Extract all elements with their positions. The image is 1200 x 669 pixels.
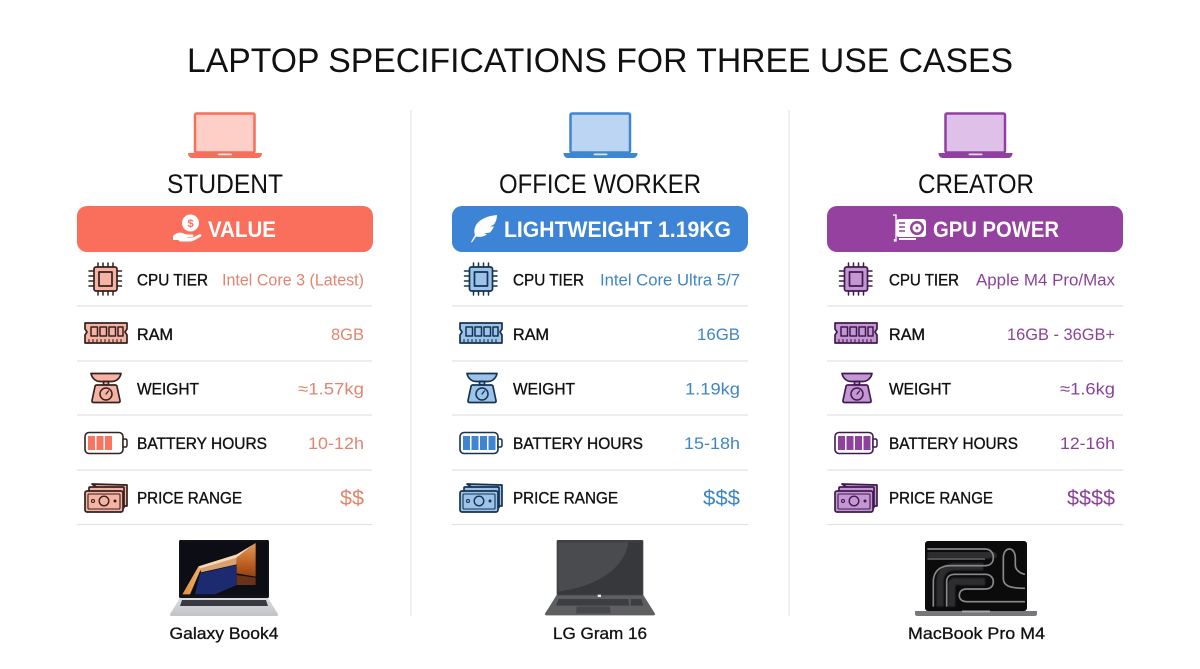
banner: value: [77, 206, 373, 252]
banner: gpu power: GPU POWER: [933, 217, 1059, 242]
row: price range: [827, 484, 1123, 524]
panel: student: [77, 114, 373, 643]
banner: lightweight: LIGHTWEIGHT 1.19KG: [504, 217, 731, 242]
panel: office worker: [452, 114, 748, 643]
row: weight: WEIGHT: [137, 380, 199, 398]
icon: hand with coin: [173, 214, 201, 242]
product name: lg gram 16: LG Gram 16: [553, 625, 647, 643]
row: battery hours: 10-12h: [308, 434, 364, 453]
row: weight: [827, 374, 1123, 415]
row: price range: PRICE RANGE: [137, 490, 242, 508]
icon: battery four bars purple: [835, 432, 877, 454]
icon: battery four bars: [460, 432, 502, 454]
row: cpu tier: [77, 263, 372, 306]
icon: hand with coin: $: [187, 218, 194, 230]
row: ram: 16GB - 36GB+: [1007, 325, 1115, 344]
product name: galaxy book4: Galaxy Book4: [170, 625, 278, 643]
product image: galaxy book4: [170, 540, 278, 616]
row: ram: [77, 323, 372, 361]
row: price range: $$$$: [1067, 487, 1115, 510]
column divider right: [788, 110, 790, 616]
product name: macbook pro m4: MacBook Pro M4: [908, 625, 1045, 643]
icon: office laptop: [564, 114, 638, 158]
column divider left: [410, 110, 412, 616]
row: battery hours: [452, 432, 748, 470]
row: ram: 16GB: [697, 325, 740, 344]
row: cpu tier: CPU TIER: [513, 272, 584, 290]
row: weight: [452, 374, 748, 415]
row: cpu tier: CPU TIER: [889, 272, 959, 290]
title: LAPTOP SPECIFICATIONS FOR THREE USE CASES: [187, 42, 1013, 80]
banner: lightweight: [452, 206, 748, 252]
row: battery hours: BATTERY HOURS: [137, 435, 267, 453]
row: battery hours: BATTERY HOURS: [889, 435, 1018, 453]
row: price range: PRICE RANGE: [513, 490, 618, 508]
silver base: [170, 598, 278, 616]
row: price range: $$$: [703, 487, 740, 510]
row: ram: [452, 323, 748, 361]
row: price range: $$: [340, 487, 364, 510]
icon: student laptop: [188, 114, 262, 158]
row: weight: WEIGHT: [513, 380, 575, 398]
row: ram: 8GB: [331, 325, 364, 344]
row: cpu tier: Intel Core 3 (Latest): [222, 270, 364, 290]
icon: battery three bars: [85, 432, 127, 454]
heading: office worker: OFFICE WORKER: [499, 169, 701, 199]
row: cpu tier: Intel Core Ultra 5/7: [600, 270, 740, 290]
row: cpu tier: [452, 263, 748, 306]
row: weight: ≈1.57kg: [298, 380, 364, 398]
row: battery hours: 15-18h: [684, 434, 740, 453]
row: price range: [77, 484, 372, 524]
icon: graphics card: [893, 215, 926, 241]
row: ram: RAM: [889, 326, 925, 344]
row: cpu tier: Apple M4 Pro/Max: [976, 270, 1115, 290]
banner: gpu power: [827, 206, 1123, 252]
product image: lg gram 16: [545, 540, 655, 615]
panel: creator: [827, 114, 1123, 643]
row: ram: RAM: [137, 326, 173, 344]
icon: creator laptop: [938, 114, 1012, 158]
row: battery hours: BATTERY HOURS: [513, 435, 643, 453]
icon: feather: [471, 215, 497, 242]
row: cpu tier: [827, 263, 1123, 306]
row: ram: RAM: [513, 326, 549, 344]
heading: creator: CREATOR: [918, 169, 1034, 199]
product image: macbook pro m4: [915, 541, 1037, 616]
row: battery hours: [827, 432, 1123, 470]
row: weight: ≈1.6kg: [1060, 380, 1115, 398]
banner: value: VALUE: [208, 217, 276, 242]
row: weight: [77, 374, 372, 415]
heading: student: STUDENT: [167, 169, 283, 199]
row: price range: PRICE RANGE: [889, 490, 993, 508]
row: cpu tier: CPU TIER: [137, 272, 208, 290]
row: weight: WEIGHT: [889, 380, 951, 398]
row: price range: [452, 484, 748, 524]
row: battery hours: [77, 432, 372, 470]
row: weight: 1.19kg: [685, 380, 740, 398]
row: ram: [827, 323, 1123, 361]
row: battery hours: 12-16h: [1060, 434, 1115, 453]
